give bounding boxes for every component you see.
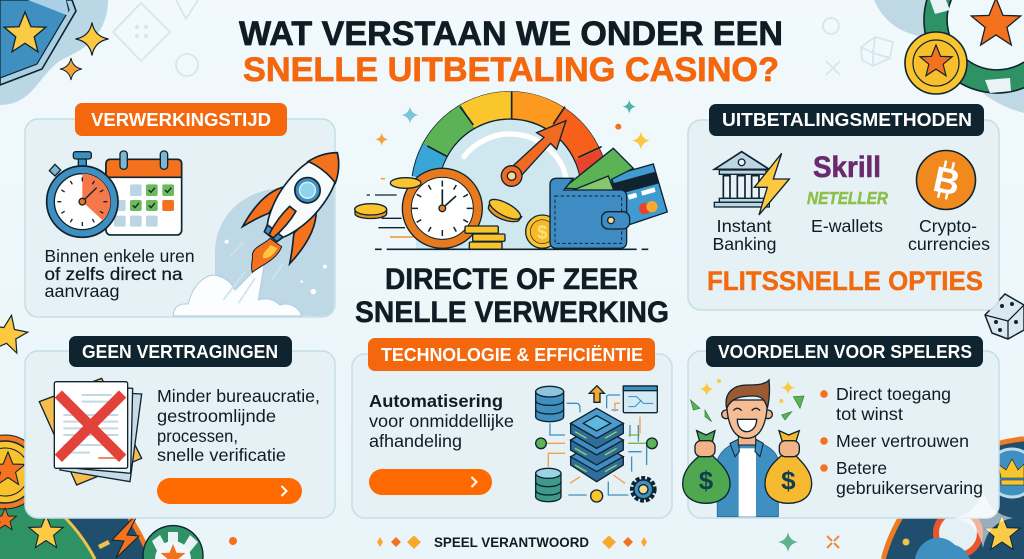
list: benefits: tot winst bbox=[836, 404, 903, 424]
decoration: bottom-left casino shapes bbox=[0, 312, 237, 559]
text: automatisering: voor onmiddellijke bbox=[369, 411, 514, 431]
labels: methods bbox=[712, 216, 990, 254]
icon: bank with lightning bbox=[714, 152, 789, 215]
icon: bitcoin: B bbox=[930, 158, 964, 203]
labels: methods: Crypto- bbox=[919, 216, 977, 236]
speed lines bbox=[367, 195, 405, 228]
text: verwerkingstijd: Binnen enkele uren bbox=[44, 246, 194, 266]
shirt bbox=[717, 440, 778, 517]
list: benefits: Meer vertrouwen bbox=[836, 431, 969, 451]
head bbox=[738, 428, 756, 445]
heading: voordelen voor spelers bbox=[706, 336, 983, 367]
list: benefits: Betere bbox=[836, 458, 887, 478]
panel: verwerkingstijd bbox=[25, 103, 363, 317]
yellow bag bbox=[765, 452, 812, 503]
decoration: watermark sparkle bbox=[953, 488, 1013, 548]
decoration: bottom-right casino shapes bbox=[778, 439, 1024, 559]
needle bbox=[501, 121, 566, 186]
heading: geen vertragingen bbox=[69, 336, 292, 367]
logo: neteller: NETELLER bbox=[807, 188, 888, 208]
heading: technologie en efficientie: TECHNOLOGIE & EFFICIËNTIE bbox=[381, 345, 643, 365]
labels: methods: currencies bbox=[908, 234, 990, 254]
list: benefits: Direct toegang bbox=[836, 384, 951, 404]
icon: crossed out documents bbox=[39, 378, 142, 485]
coins bbox=[355, 178, 559, 249]
heading: verwerkingstijd: VERWERKINGSTIJD bbox=[91, 110, 271, 130]
rocket illustration bbox=[173, 134, 363, 316]
text: geen vertragingen: gestroomlijnde bbox=[157, 406, 276, 426]
button: orange arrow bbox=[369, 469, 492, 495]
decoration: top-left badge bbox=[0, 0, 198, 105]
heading: directe of zeer snelle verwerking bbox=[355, 263, 669, 329]
decoration: top-right casino chip and coin bbox=[823, 0, 1024, 113]
illustration: happy player with money bags bbox=[683, 379, 812, 517]
panel: voordelen voor spelers bbox=[683, 336, 999, 518]
heading: geen vertragingen: GEEN VERTRAGINGEN bbox=[82, 342, 278, 362]
panel: central gauge bbox=[355, 92, 669, 329]
heading: directe of zeer snelle verwerking: DIRECTE OF ZEER bbox=[385, 263, 638, 296]
list: benefits bbox=[820, 384, 983, 498]
wallet with cash and card bbox=[550, 148, 667, 248]
illustration: server network bbox=[536, 386, 657, 502]
sparkles bbox=[375, 100, 650, 150]
clock bbox=[402, 168, 482, 248]
text: geen vertragingen bbox=[157, 386, 320, 465]
text: geen vertragingen: snelle verificatie bbox=[157, 445, 286, 465]
panel: technologie en efficientie bbox=[352, 338, 672, 518]
logo: skrill: Skrill bbox=[813, 151, 881, 184]
title bbox=[239, 15, 783, 89]
text: geen vertragingen: Minder bureaucratie, bbox=[157, 386, 320, 406]
heading: voordelen voor spelers: VOORDELEN VOOR SPELERS bbox=[718, 342, 972, 362]
illustration: speedometer bbox=[355, 92, 667, 249]
labels: methods: Instant bbox=[716, 216, 772, 236]
heading: verwerkingstijd bbox=[75, 103, 287, 136]
footer: speel verantwoord bbox=[377, 535, 647, 550]
text: verwerkingstijd: aanvraag bbox=[44, 281, 120, 301]
panel: uitbetalingsmethoden bbox=[688, 104, 999, 310]
text: geen vertragingen: processen, bbox=[157, 426, 238, 446]
illustration: happy player with money bags: $ bbox=[781, 465, 796, 495]
list: benefits: gebruikerservaring bbox=[836, 478, 983, 498]
title line 1: WAT VERSTAAN WE ONDER EEN bbox=[239, 15, 783, 53]
title line 2: SNELLE UITBETALING CASINO? bbox=[243, 51, 779, 89]
green bag bbox=[683, 452, 730, 503]
text: automatisering: afhandeling bbox=[369, 431, 462, 451]
icon: bitcoin bbox=[916, 150, 976, 210]
icon: stopwatch bbox=[47, 152, 118, 237]
illustration: happy player with money bags: $ bbox=[699, 465, 714, 495]
icon: calendar bbox=[106, 151, 182, 235]
labels: methods: E-wallets bbox=[811, 216, 883, 236]
heading: uitbetalingsmethoden: UITBETALINGSMETHODEN bbox=[722, 110, 972, 130]
heading: uitbetalingsmethoden bbox=[709, 104, 984, 136]
text: verwerkingstijd bbox=[44, 246, 194, 301]
illustration: speedometer: $ bbox=[537, 221, 548, 242]
button: orange arrow bbox=[157, 478, 302, 504]
panel: geen vertragingen bbox=[25, 336, 335, 518]
text: automatisering: Automatisering bbox=[369, 391, 503, 411]
heading: technologie en efficientie bbox=[368, 338, 655, 371]
text: flitssnelle opties: FLITSSNELLE OPTIES bbox=[707, 266, 983, 296]
text: verwerkingstijd: of zelfs direct na bbox=[44, 264, 183, 284]
labels: methods: Banking bbox=[712, 234, 776, 254]
decoration: dice right edge bbox=[985, 294, 1024, 339]
footer: speel verantwoord: SPEEL VERANTWOORD bbox=[434, 535, 589, 550]
heading: directe of zeer snelle verwerking: SNELLE VERWERKING bbox=[355, 296, 669, 329]
text: automatisering bbox=[369, 391, 514, 451]
